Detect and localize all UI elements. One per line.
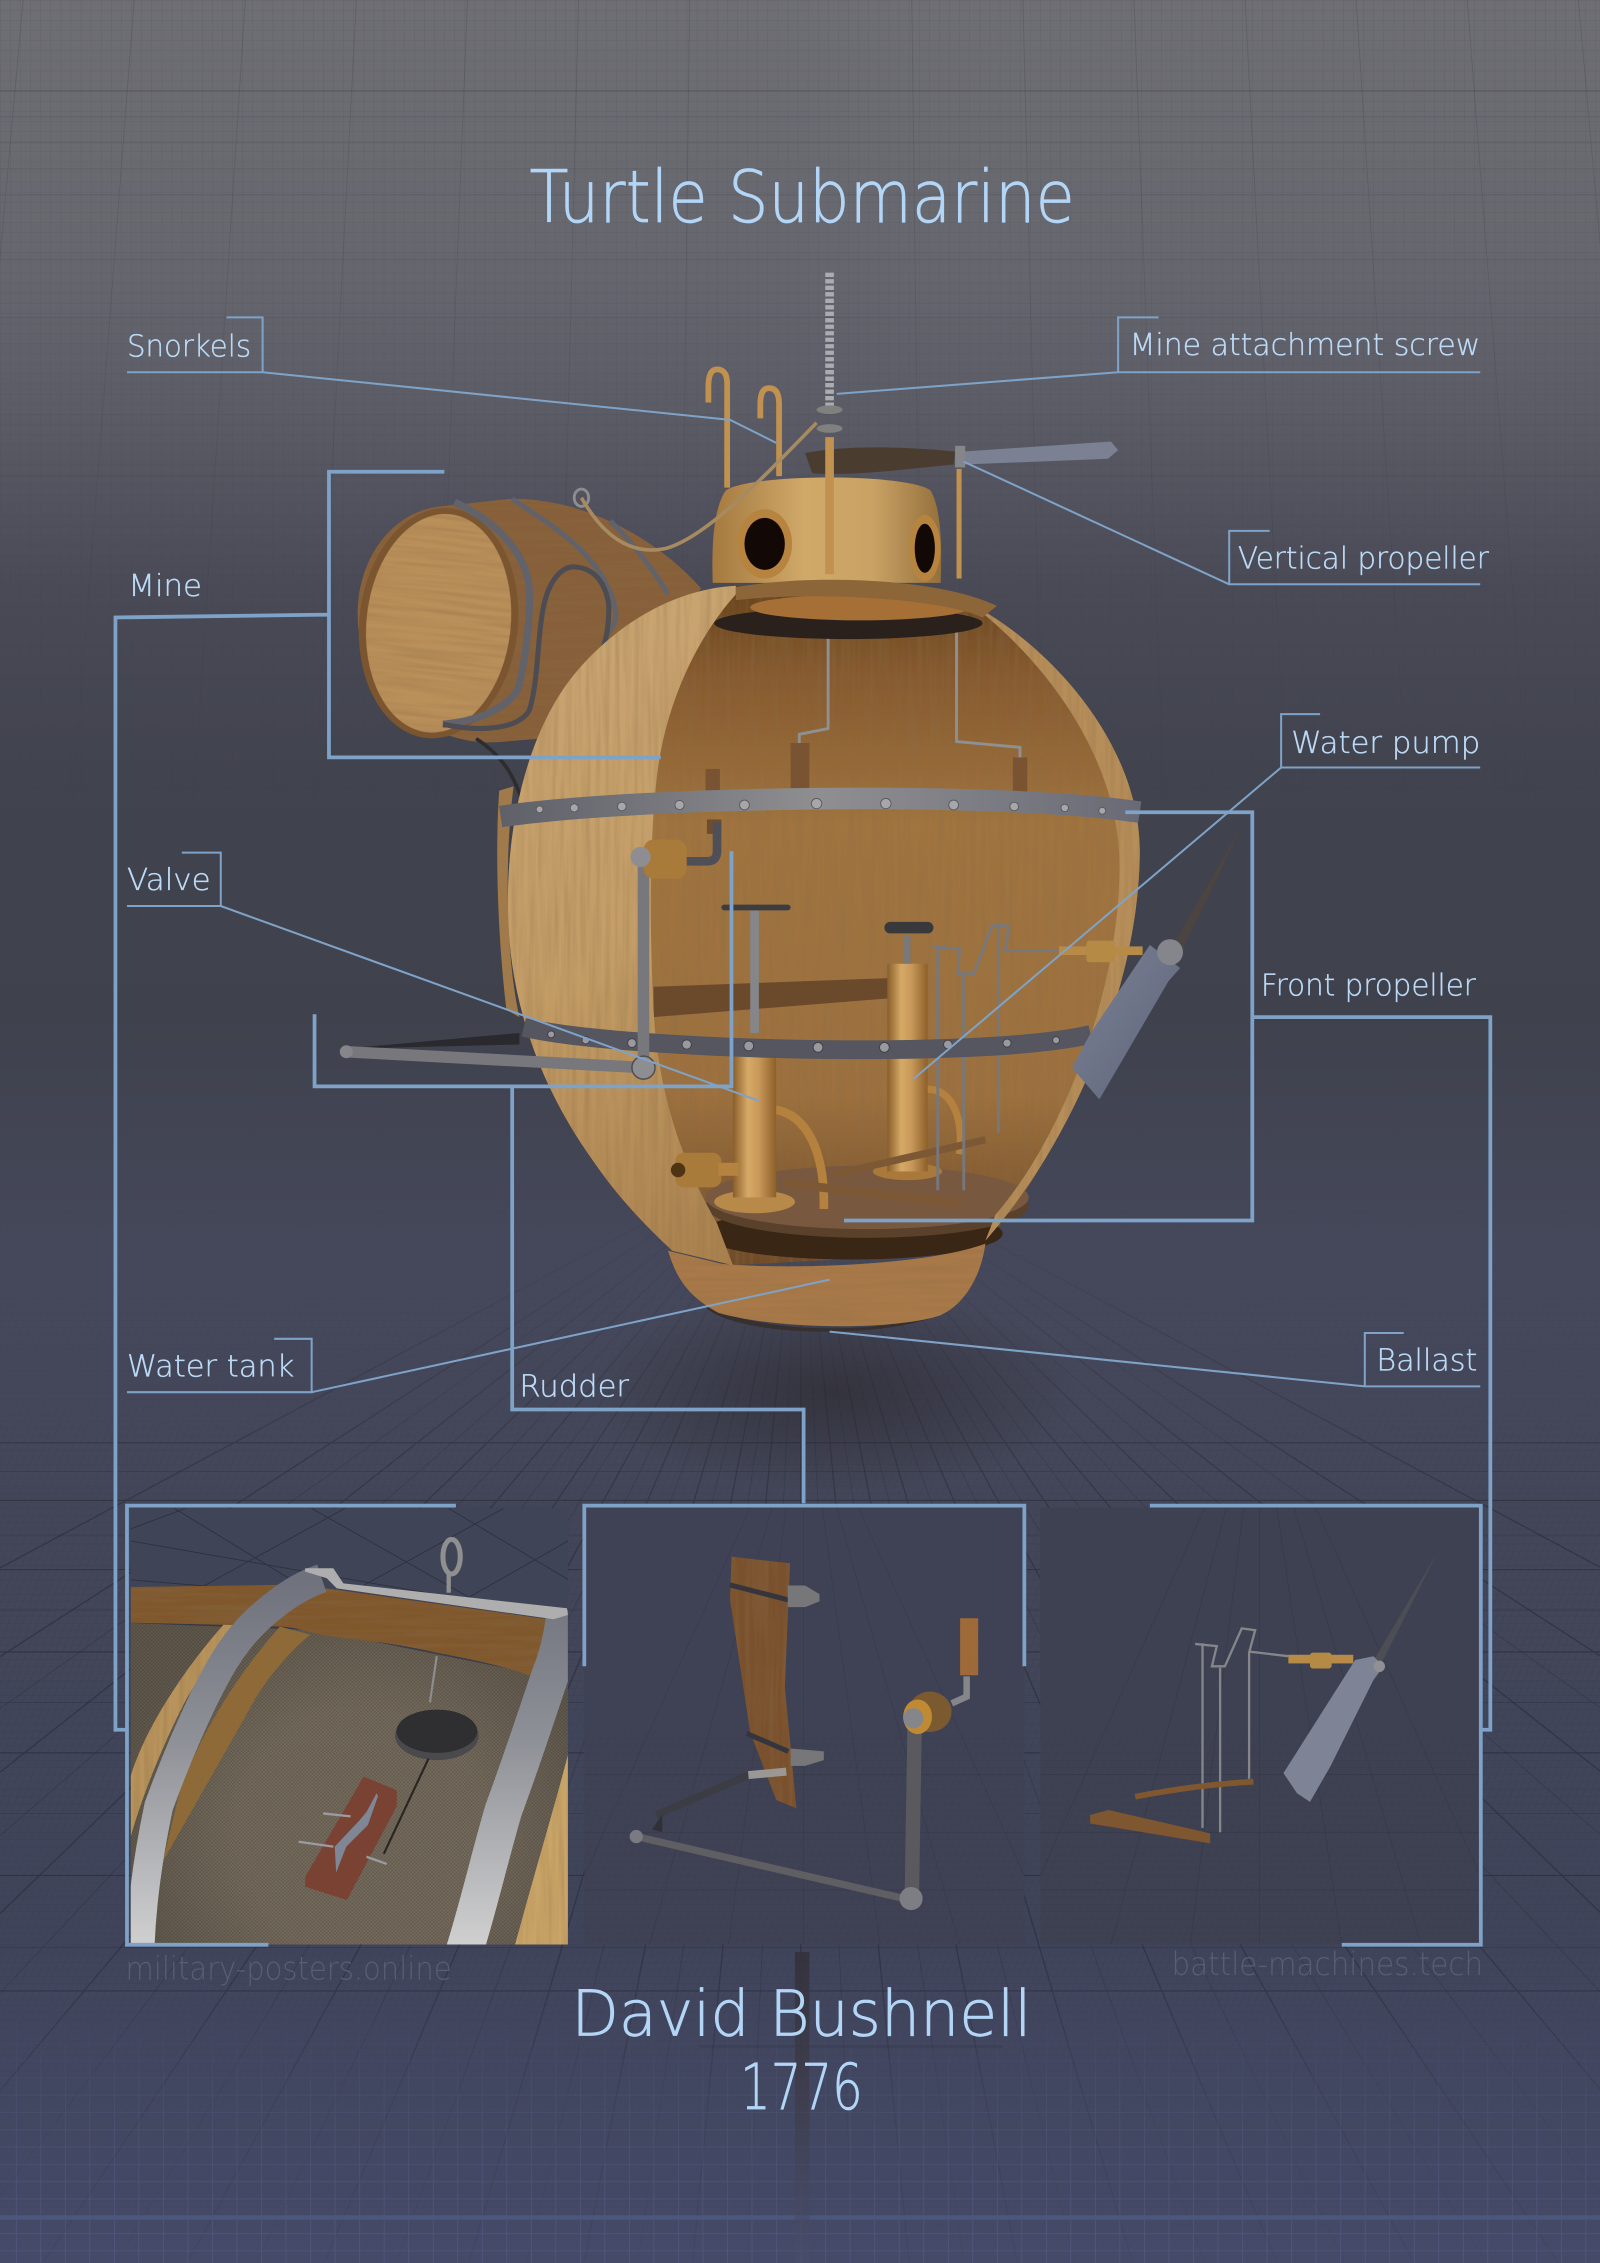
firing plate	[299, 1777, 397, 1900]
lower iron band	[524, 1027, 1091, 1052]
label: Valve: Valve	[127, 863, 211, 898]
label: Ballast	[830, 1332, 1480, 1386]
label: Mine attachment screw: Mine attachment screw	[1130, 328, 1480, 363]
linkage	[630, 1720, 923, 1910]
label: Water pump: Water pump	[1291, 726, 1480, 761]
upper iron band	[501, 798, 1140, 817]
panel: front propeller detail	[1040, 1508, 1480, 1945]
rudder linkage	[340, 822, 717, 1079]
straps and hinges	[730, 1585, 788, 1751]
water pump right	[873, 922, 960, 1180]
label: Snorkels	[127, 317, 776, 443]
wooden beam	[131, 1585, 568, 1681]
water tank	[668, 1244, 985, 1326]
upper rods and handles	[706, 600, 1027, 834]
watermark left: military-posters.online	[126, 1951, 452, 1987]
label: Mine attachment screw	[837, 317, 1480, 394]
footer: year: 1776	[740, 2050, 863, 2124]
label: Water tank	[127, 1280, 830, 1392]
label: Water tank: Water tank	[127, 1349, 294, 1384]
label: Mine: Mine	[128, 569, 202, 604]
thumbnail frames	[127, 1506, 1481, 1945]
rope	[581, 423, 817, 550]
hub and handle	[903, 1618, 978, 1734]
steel bar and ring	[305, 1568, 568, 1619]
blades	[1283, 1553, 1437, 1802]
label: Ballast: Ballast	[1376, 1344, 1477, 1379]
label: Valve	[127, 853, 759, 1101]
fabric	[130, 1623, 568, 1945]
floor disc	[706, 1166, 1029, 1238]
snorkels	[708, 369, 779, 488]
rudder blade	[730, 1557, 796, 1808]
watermark right: battle-machines.tech	[1171, 1947, 1483, 1983]
opening below floor	[700, 1208, 1003, 1259]
horizontal propeller	[805, 441, 1118, 579]
hull shell left	[508, 586, 736, 1265]
label: Vertical propeller: Vertical propeller	[1238, 541, 1489, 576]
side fin	[497, 786, 519, 1017]
brass dome	[712, 478, 997, 620]
flange shadow	[714, 607, 982, 639]
label: Front propeller: Front propeller	[1261, 968, 1476, 1003]
crank rods	[1195, 1628, 1288, 1832]
shelf	[654, 978, 889, 1017]
floor shadow	[589, 1291, 1079, 1493]
label: Front propeller	[844, 812, 1490, 1730]
heading: title: Turtle Submarine	[529, 156, 1075, 240]
label: Water pump	[913, 714, 1480, 1079]
panel: rudder detail	[584, 1508, 1024, 1945]
mine barrel	[348, 489, 701, 815]
front propeller	[1072, 822, 1244, 1099]
brass bearing	[1288, 1653, 1353, 1668]
pedals	[1090, 1782, 1253, 1843]
right wood corner	[515, 1753, 568, 1945]
hull shell right	[982, 610, 1140, 1241]
label: Snorkels: Snorkels	[127, 329, 251, 364]
water pump left	[671, 905, 824, 1213]
middle wood	[163, 1627, 310, 1861]
light wood side	[131, 1624, 238, 1837]
steel hoops	[140, 1578, 322, 1951]
label: Vertical propeller	[964, 462, 1489, 584]
crank and pedals	[783, 925, 1143, 1203]
panel: mine detail	[130, 1508, 568, 1951]
label: Rudder	[315, 851, 804, 1503]
footer: inventor: David Bushnell	[571, 1977, 1032, 2051]
label: Mine	[115, 472, 661, 1730]
bell weight	[395, 1710, 479, 1760]
label: Rudder: Rudder	[519, 1370, 630, 1405]
ballast	[704, 1306, 952, 1332]
submarine illustration	[340, 273, 1244, 1332]
hull interior	[508, 586, 1140, 1265]
mine screw	[817, 273, 843, 574]
